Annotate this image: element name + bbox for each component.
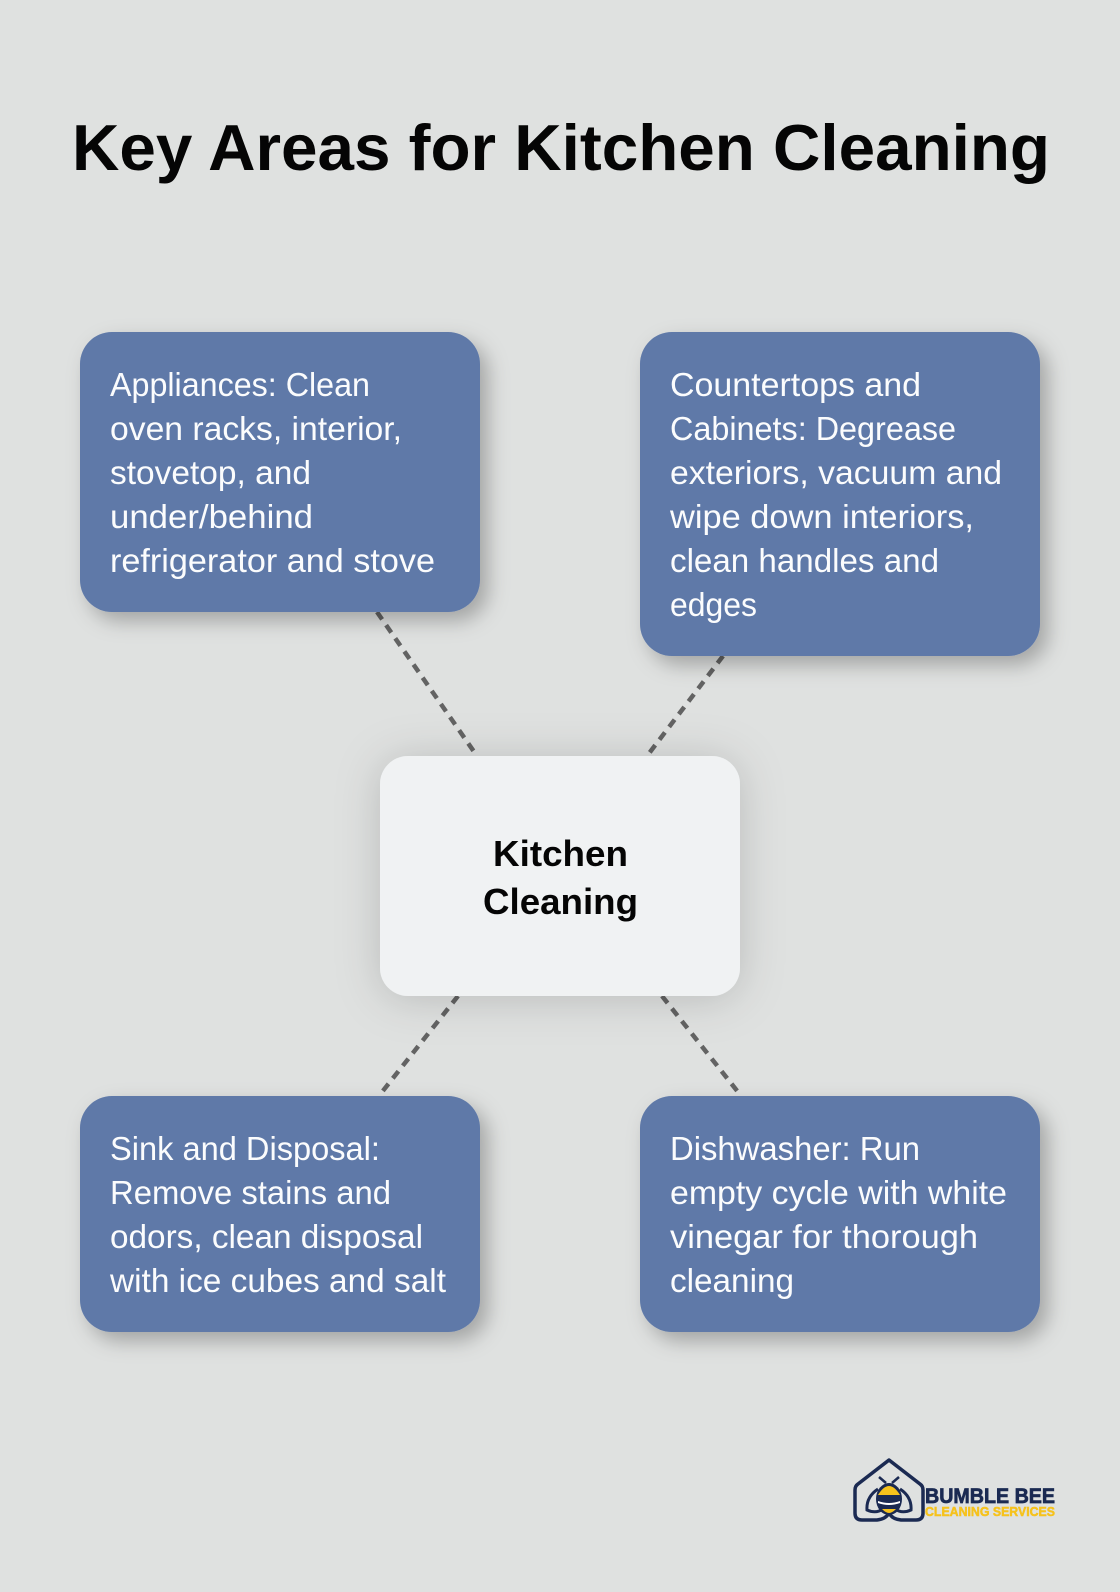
panel: sink and disposal [80,1096,480,1332]
connectors: dashed lines between center and cards [377,612,738,1092]
panel: countertops and cabinets: edges [670,586,757,623]
panel: appliances: oven racks, interior, [110,410,402,447]
logo: bumble bee cleaning services [855,1460,1055,1520]
panel: appliances: under/behind [110,498,313,535]
logo: bumble bee cleaning services: BUMBLE BEE [925,1485,1055,1508]
panel: appliances [80,332,480,612]
panel: center kitchen cleaning [380,756,740,996]
panel: countertops and cabinets: exteriors, vacuum and [670,454,1002,491]
panel: appliances: refrigerator and stove [110,542,435,579]
panel: countertops and cabinets [640,332,1040,656]
panel: dishwasher: cleaning [670,1262,794,1299]
panel: sink and disposal: Sink and Disposal: [110,1130,380,1167]
panel: dishwasher: Dishwasher: Run [670,1130,920,1167]
title: Key Areas for Kitchen Cleaning [72,111,1050,184]
logo: bumble bee cleaning services: CLEANING SERVICES [925,1504,1055,1519]
panel: appliances: stovetop, and [110,454,311,491]
panel: countertops and cabinets: clean handles and [670,542,939,579]
panel: dishwasher [640,1096,1040,1332]
panel: sink and disposal: Remove stains and [110,1174,391,1211]
panel: center kitchen cleaning: Kitchen [493,833,628,874]
icon: house and bee [855,1460,923,1520]
panel: dishwasher: vinegar for thorough [670,1218,978,1255]
panel: appliances: Appliances: Clean [110,366,370,403]
panel: sink and disposal: with ice cubes and salt [109,1262,446,1299]
panel: center kitchen cleaning: Cleaning [483,881,638,922]
panel: sink and disposal: odors, clean disposal [110,1218,423,1255]
panel: countertops and cabinets: Cabinets: Degrease [670,410,956,447]
panel: countertops and cabinets: wipe down interiors, [669,498,974,535]
panel: dishwasher: empty cycle with white [670,1174,1007,1211]
panel: countertops and cabinets: Countertops and [670,366,921,403]
